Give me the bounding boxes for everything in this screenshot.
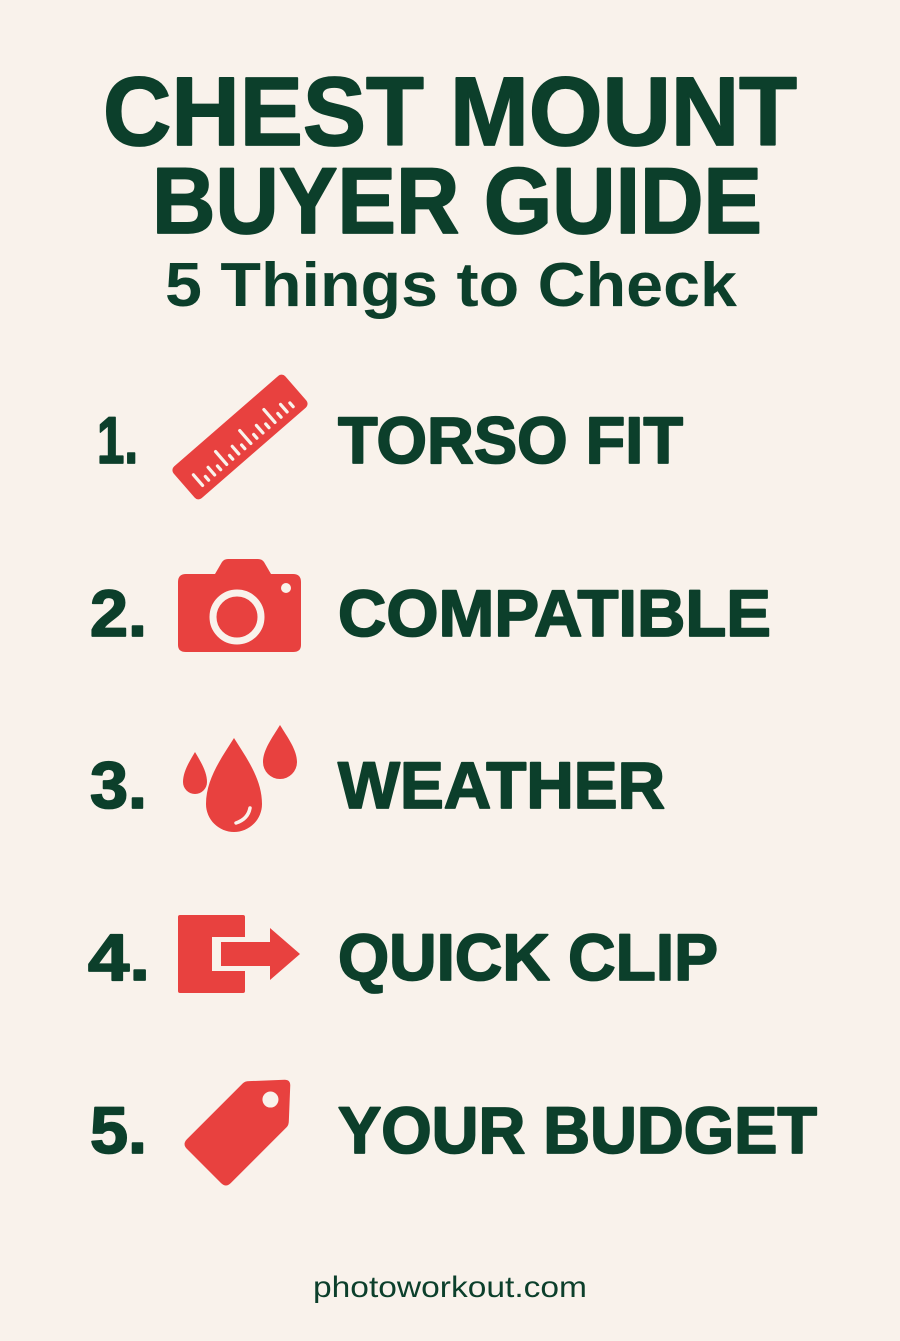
item 1: torso fit [97,373,683,501]
icon: ruler [170,373,310,501]
title: BUYER GUIDE [152,148,762,253]
item 5: budget: YOUR BUDGET [338,1093,817,1167]
item 4: quick clip: 4. [88,920,150,994]
item 3: weather [90,725,665,832]
item 4: quick clip: QUICK CLIP [338,920,718,994]
item 1: torso fit: 1. [97,403,138,477]
title: CHEST MOUNT [103,57,797,166]
item 4: quick clip [88,915,718,994]
icon: clip arrow [178,915,300,993]
subtitle: 5 Things to Check [165,251,738,320]
footer: photoworkout.com [313,1271,587,1304]
item 2: compatible: COMPATIBLE [338,576,771,650]
item 2: compatible: 2. [90,576,147,650]
item 5: budget: 5. [90,1093,147,1167]
item 2: compatible [90,559,771,652]
item 5: budget [90,1059,817,1188]
icon: water drops [183,725,297,832]
item 3: weather: 3. [90,748,147,822]
icon: camera [178,559,301,652]
title [103,57,797,253]
item 3: weather: WEATHER [338,748,665,822]
icon: price tag [182,1059,311,1188]
label: TORSO FIT [338,403,683,477]
